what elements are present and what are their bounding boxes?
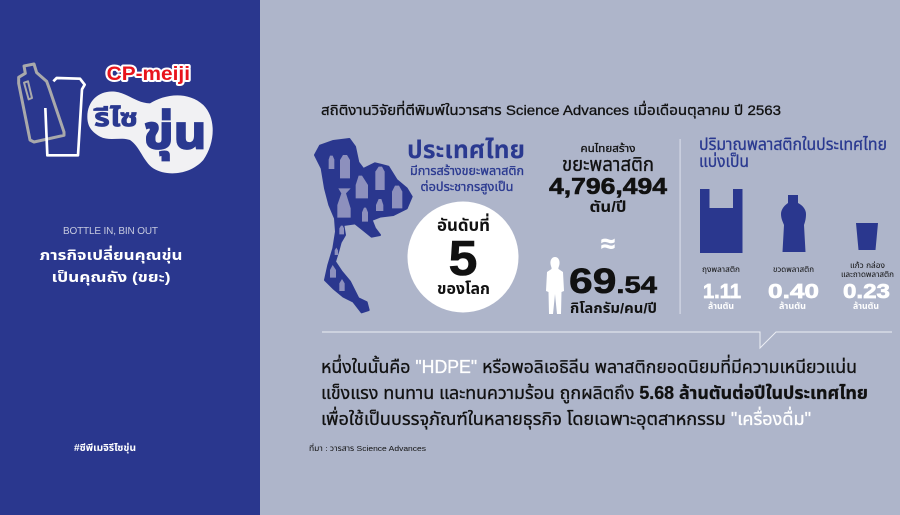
stat: per person	[569, 262, 658, 316]
rank circle: ของโลก	[437, 281, 490, 298]
divider	[680, 139, 681, 314]
mission heading: ภารกิจเปลี่ยนคุณขุ่น	[40, 245, 182, 264]
hashtag: #ซีพีเมจิรีไซขุ่น	[74, 441, 136, 454]
stat: total plastic waste: ขยะพลาสติก	[562, 154, 654, 176]
mission heading: เป็นคุณถัง (ขยะ)	[52, 269, 170, 286]
heading: Thailand: ประเทศไทย	[407, 136, 525, 164]
subtitle: BOTTLE IN, BIN OUT	[63, 226, 158, 237]
source note: ที่มา : วารสาร Science Advances	[309, 443, 426, 453]
icon: cup	[856, 223, 878, 250]
text: high plastic waste per capita: ต่อประชากรสูงเป็น	[420, 180, 514, 194]
icon: person	[546, 257, 564, 314]
mission heading	[40, 245, 182, 286]
item: plastic bags: 1.11	[703, 281, 741, 303]
stat: per person: กิโลกรัม/คน/ปี	[570, 300, 657, 316]
logo: CP-meiji re-shake	[19, 64, 213, 173]
logo word: re-shake: รีไซ	[93, 105, 138, 132]
icon: bottle handle slot	[24, 81, 32, 99]
stat: total plastic waste	[549, 143, 667, 216]
item: cups, boxes and trays	[841, 223, 894, 311]
item: plastic bags	[700, 189, 742, 311]
item: cups, boxes and trays: แก้ว กล่อง	[850, 260, 885, 270]
item: plastic bags: ถุงพลาสติก	[702, 265, 740, 274]
item: plastic bags: ล้านตัน	[708, 301, 734, 311]
icon: bottle	[781, 195, 806, 252]
stat: total plastic waste: คนไทยสร้าง	[580, 143, 636, 155]
heading: plastic breakdown	[699, 135, 887, 171]
item: cups, boxes and trays: 0.23	[843, 281, 890, 303]
stat: per person: 69 .54	[569, 262, 658, 301]
text: HDPE explanation: หนึ่งในนั้นคือ "HDPE" หรือพอลิเอธิลีน พลาสติกยอดนิยมที่มีความเหนียวแน่น	[321, 354, 857, 377]
rank circle: 5	[448, 232, 478, 286]
left panel	[0, 0, 260, 515]
text: high plastic waste per capita: มีการสร้างขยะพลาสติก	[410, 164, 524, 178]
icon: bag	[700, 189, 742, 253]
logo word: CP-meiji: CP-meiji	[107, 64, 190, 85]
icon: bottle outline	[19, 64, 64, 142]
logo word: cloudy: ขุ่น	[143, 106, 207, 160]
item: cups, boxes and trays: และถาดพลาสติก	[841, 270, 894, 279]
item: plastic bottles	[768, 195, 819, 311]
heading: plastic breakdown: ปริมาณพลาสติกในประเทศไทย	[699, 135, 887, 154]
rank circle: อันดับที่	[437, 213, 490, 235]
heading: study source line: สถิติงานวิจัยที่ตีพิมพ์ในวารสาร Science Advances เมื่อเดือนตุลาคม ปี 2563	[321, 100, 781, 119]
text: HDPE explanation: เพื่อใช้เป็นบรรจุภัณฑ์ในหลายธุรกิจ โดยเฉพาะอุตสาหกรรม "เครื่องดื่ม"	[321, 406, 811, 430]
item: plastic bottles: ขวดพลาสติก	[773, 265, 814, 274]
text: high plastic waste per capita	[410, 164, 524, 194]
milk splash blob	[87, 91, 213, 173]
bottle icons in map	[329, 155, 402, 291]
icon: cup outline	[45, 78, 85, 155]
heading: plastic breakdown: แบ่งเป็น	[699, 152, 749, 171]
item: cups, boxes and trays: ล้านตัน	[853, 301, 879, 311]
item: plastic bottles: ล้านตัน	[779, 301, 806, 311]
map: Thailand with bottles	[315, 139, 412, 312]
stat: total plastic waste: 4,796,494	[549, 173, 667, 199]
approximately equal sign: ≈	[601, 230, 615, 258]
text: HDPE explanation: แข็งแรง ทนทาน และทนความร้อน ถูกผลิตถึง 5.68 ล้านตันต่อปีในประเทศไทย	[321, 383, 868, 405]
rank circle	[408, 202, 518, 312]
text: HDPE explanation	[321, 354, 868, 430]
item: plastic bottles: 0.40	[768, 281, 819, 303]
stat: total plastic waste: ตัน/ปี	[590, 199, 626, 216]
callout line	[322, 332, 892, 348]
